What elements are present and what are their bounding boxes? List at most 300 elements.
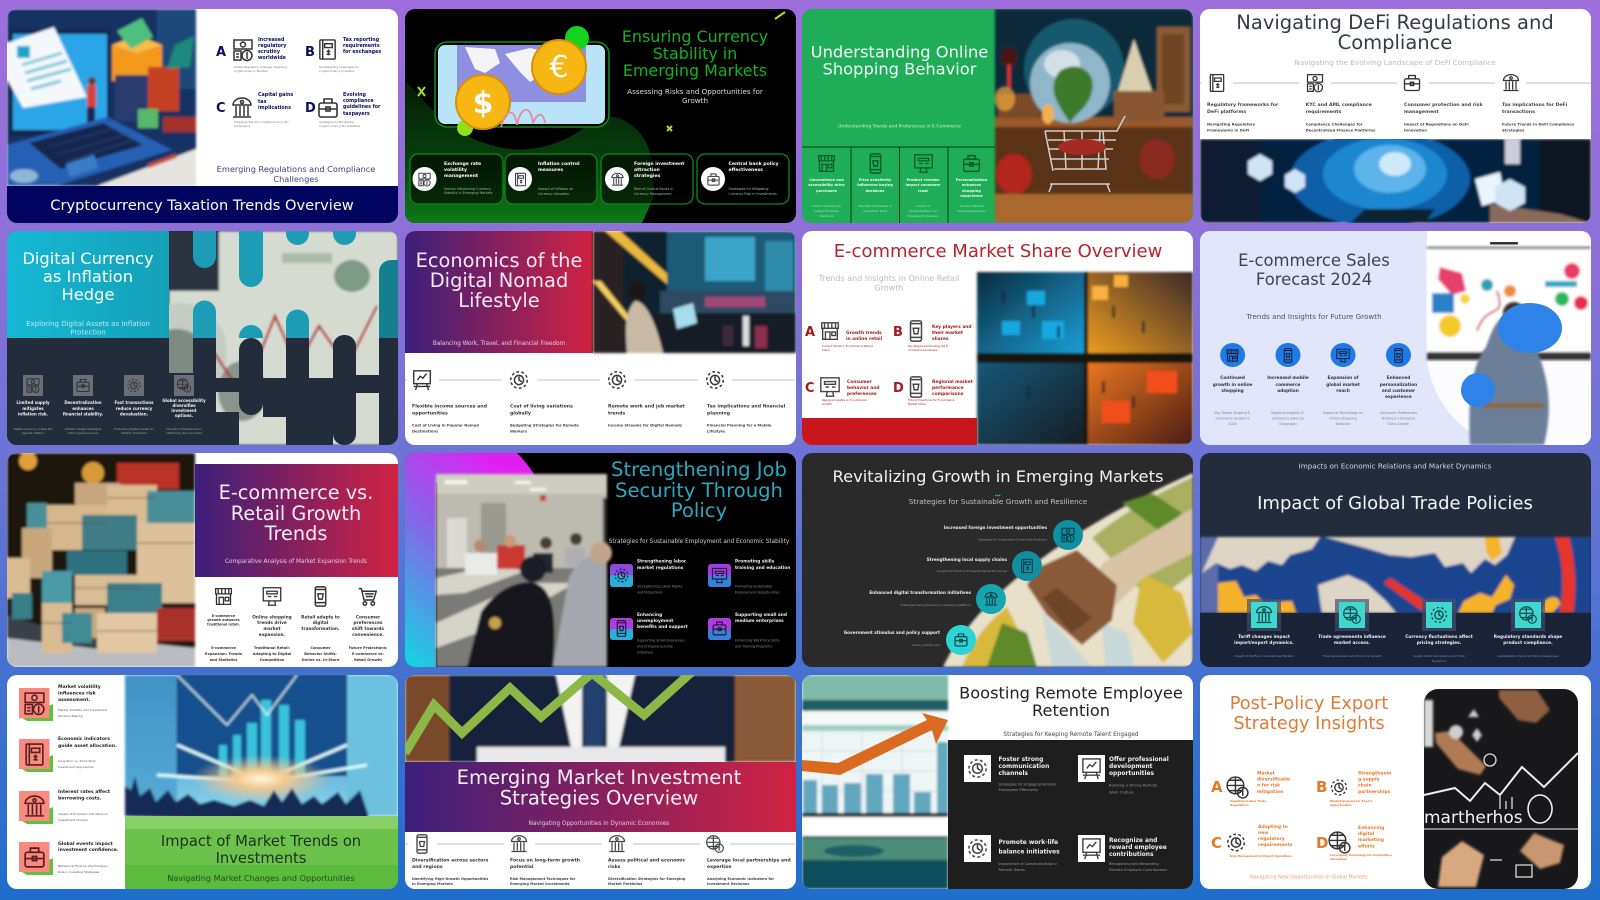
image: crowd cheering at rising chart [125, 675, 398, 824]
column: price sensitivity: Price sensitivity [859, 178, 892, 182]
item: professional development: Building a Strong Remote [1109, 782, 1158, 788]
step 3: Consumer protection and risk [1404, 102, 1483, 108]
column 4 [1494, 599, 1562, 658]
item B: Tax Reporting Challenges for [318, 65, 360, 69]
step: digital transformation: Challenges Facing Recovery in Developing Nations [900, 603, 972, 607]
column 4: Enhanced [1387, 375, 1410, 381]
card: exchange rate: Stability in Emerging Markets [444, 191, 493, 195]
item D: Cryptocurrency Tax Liabilities [319, 124, 361, 128]
column 4 [349, 589, 388, 662]
title: Stability in [653, 44, 737, 63]
step 4 [707, 372, 786, 434]
step 3: risks [608, 864, 621, 870]
column: price sensitivity: influences buying [857, 183, 893, 187]
item C [805, 378, 880, 406]
item D: efforts [1358, 844, 1375, 850]
step 4 [1502, 75, 1574, 132]
column 4: Future Projections: [349, 646, 388, 650]
item B: B [1316, 778, 1327, 796]
column: decentralization: enhances [72, 406, 94, 411]
step 2: potential [510, 864, 534, 870]
item C: C [1211, 834, 1222, 852]
item B: Tax reporting [343, 37, 380, 43]
item C: Compliance [234, 124, 251, 128]
row 3: Investment Choices [58, 818, 88, 822]
column: convenience: Convenience and [809, 178, 844, 182]
column: convenience: Online Purchase [814, 209, 839, 213]
title: as Inflation [43, 267, 133, 286]
panel: Economics of the Digital Nomad Lifestyle [405, 231, 796, 445]
column 1 [1213, 343, 1253, 426]
item A: regulatory [258, 43, 287, 49]
step 3: trends [608, 410, 625, 416]
column: decentralization [63, 375, 104, 435]
step 2 [510, 372, 579, 434]
title: Strengthening Job [611, 458, 787, 481]
item: recognition: Recognize and [1109, 838, 1157, 844]
title band: Balancing Work, Travel, and Financial Freedom [433, 341, 566, 347]
item: unemployment benefits: benefits and support [637, 624, 688, 630]
step 3 [608, 836, 686, 886]
step 2: globally [510, 410, 531, 416]
column: fast transactions: Fast transactions [114, 400, 154, 405]
image: stacked parcels on laptop [5, 452, 195, 667]
column: decentralization: with Cryptocurrencies [68, 431, 99, 435]
column 4: Retail Growth [354, 658, 382, 662]
item B: B [305, 45, 315, 60]
step 3: Innovation [1404, 128, 1427, 132]
column 2: trends drive [257, 620, 287, 626]
item B: Strengthenin [1358, 770, 1391, 776]
step 2: Budgeting Strategies for Remote [510, 424, 579, 428]
step 2 [1306, 75, 1376, 132]
column: price sensitivity: Consumer Trust [863, 209, 888, 213]
card: foreign investment: strategies [634, 173, 661, 179]
column 3: transformation. [301, 626, 340, 632]
column: product reviews: trust [918, 189, 928, 193]
step 2 [510, 836, 580, 886]
column: price sensitivity [857, 154, 893, 213]
column 1: Expansion: Trends [205, 652, 242, 656]
image: dollar bill and red chart [131, 231, 398, 445]
item: skills training: Employment Opportunities [735, 590, 780, 594]
column: personalization: Personalization [956, 178, 988, 182]
item D: D [305, 101, 316, 116]
card: exchange rate: volatility [444, 167, 467, 173]
step: supply chains [927, 551, 1042, 581]
column: global accessibility: Global accessibility [162, 398, 206, 403]
step 3: Assess political and economic [608, 858, 686, 864]
item B: Key Players Dominating the E- [908, 344, 949, 348]
item A [1211, 770, 1290, 807]
column 1: Key Trends Shaping E- [1214, 411, 1252, 415]
step 4 [707, 836, 791, 886]
item: unemployment benefits: Initiatives [637, 650, 653, 654]
step 4: Future Trends in DeFi Compliance [1502, 122, 1574, 126]
column 2: Traditional Retail: [254, 646, 291, 650]
column: convenience: Factors Influencing [812, 204, 841, 208]
step 4: expertise [707, 864, 731, 870]
subtitle: Exploring Digital Assets as Inflation [26, 320, 150, 328]
column 4: Regulatory standards shape [1494, 634, 1562, 640]
column 2 [1267, 343, 1309, 426]
item: small enterprises: Enhancing Workforce Skills [735, 638, 780, 642]
item A: Adapting to New Trade [1230, 799, 1266, 803]
item: small enterprises: and Training Programs [735, 644, 772, 648]
subtitle: Growth [682, 96, 708, 105]
column 3: Behavior [1336, 422, 1351, 426]
column: global accessibility: diversifies [172, 403, 196, 408]
card: exchange rate: management [444, 173, 479, 179]
column 4: and customer [1382, 388, 1416, 394]
image: hands drawing on chalkboard: martherhos [1424, 808, 1523, 828]
item: professional development [1078, 755, 1169, 794]
item: labor regulations [610, 558, 687, 594]
item D: Enhancing [1358, 825, 1384, 831]
title block: Navigating Market Changes and Opportunities [167, 873, 355, 883]
column 3: Dynamics [1432, 659, 1447, 663]
step 2: Cost of living variations [510, 404, 573, 410]
title: Revitalizing Growth in Emerging Markets [833, 467, 1163, 486]
image: digital finance hologram [1200, 131, 1591, 227]
column 2: commerce Sales by [1272, 416, 1304, 420]
item: professional development: development [1109, 764, 1153, 770]
panel: Cryptocurrency Taxation Trends Overview [7, 9, 398, 223]
column 1: commerce Growth in [1215, 416, 1250, 420]
item: work-life balance: Remote Teams [998, 868, 1025, 872]
item: communication: channels [998, 771, 1029, 777]
row 4: Global events impact [58, 841, 114, 847]
column 1: Continued [1220, 375, 1245, 381]
column 1: E-commerce [211, 646, 236, 650]
step: supply chains: Investment Trends in Emerging Market Economies [937, 569, 1008, 573]
item B [1316, 770, 1391, 807]
item B: B [893, 325, 903, 340]
column: product reviews: Product reviews [907, 178, 939, 182]
column 4: Consumer Preferences [1380, 411, 1417, 415]
column 2: Competition [260, 658, 285, 662]
row 2: Investment Approaches [58, 765, 94, 769]
item A: A [805, 325, 815, 340]
column 4 [1380, 343, 1417, 426]
row 1 [19, 684, 108, 721]
column: limited supply: Limited supply [16, 400, 50, 405]
item: communication: Strategies for Engaging Remote [998, 782, 1057, 786]
item D [893, 377, 973, 406]
column 1: import/export dynamics. [1234, 640, 1294, 646]
item: work-life balance [964, 835, 1060, 872]
column 3: Expansion of [1327, 375, 1359, 381]
column 3 [301, 587, 340, 662]
item B: chain [1358, 782, 1372, 788]
panel: Ensuring Currency Stability [405, 9, 796, 223]
subtitle: Trends and Insights in Online Retail [818, 274, 959, 283]
step 4: Analyzing Economic Indicators for [707, 877, 774, 881]
item A: n for risk [1257, 782, 1281, 788]
column 3: Consumer [310, 646, 331, 650]
item D: Strategies for Minimizing [319, 120, 354, 124]
column 2: Regional Insights: E- [1271, 411, 1306, 415]
item A: Cryptocurrency Taxation [234, 69, 268, 73]
title: Post-Policy Export [1230, 693, 1388, 714]
image: handshake over world map [943, 473, 1193, 667]
column 3: reach [1336, 388, 1350, 394]
step 1: Cost of Living in Popular Nomad [412, 424, 479, 428]
column 4: convenience. [352, 632, 384, 638]
column 2: Online shopping [252, 614, 292, 620]
column 4: preferences [353, 620, 383, 626]
item C: Growth [822, 402, 832, 406]
item: skills training [708, 558, 790, 594]
item D [305, 92, 381, 128]
item: communication: communication [998, 764, 1049, 770]
panel: Impact of Market Trends on Investments [7, 675, 398, 889]
step 1: Flexible income sources and [412, 404, 487, 410]
item: recognition: Recognizing and Rewarding [1109, 862, 1159, 866]
column 1: E-commerce [212, 614, 236, 618]
item B [893, 321, 972, 352]
column 4: personalization [1380, 382, 1417, 388]
step: foreign investment: Strategies for Sustainable Growth Post-Pandemic [978, 538, 1047, 542]
title: Policy [671, 499, 728, 522]
item A: A [216, 45, 226, 60]
column: personalization: shopping [962, 189, 981, 193]
item: labor regulations: market regulations [637, 565, 684, 571]
column 3: pricing strategies. [1417, 640, 1462, 646]
step 1: and regions [412, 864, 443, 870]
card: inflation control: Inflation control [538, 161, 580, 167]
item D: D [893, 381, 904, 396]
item A: Current Trends in E-commerce Market [822, 344, 873, 348]
item A: A [1211, 778, 1223, 796]
column 3: global market [1326, 382, 1360, 388]
step 4: Leverage local partnerships and [707, 858, 791, 864]
row 2 [19, 736, 117, 772]
column: fast transactions: Evaluating Digital Assets for [114, 427, 155, 431]
subtitle with arrows: ▸▸▸ [995, 492, 1001, 498]
panel: Strengthening Job Security Through Policy [405, 453, 796, 667]
column: price sensitivity: The Role of Reviews in [857, 204, 892, 208]
item D: comparisons [932, 391, 964, 397]
row 4: investment confidence. [58, 847, 119, 853]
item: professional development: opportunities [1109, 771, 1154, 777]
item C: Regional Insights on E-commerce [822, 398, 867, 402]
panel: Emerging Market Investment Strategies Overview [405, 675, 796, 889]
step: digital transformation: Enhanced digital transformation initiatives [869, 590, 971, 595]
image: world trade map [1200, 537, 1591, 613]
row 2: guide asset allocation. [58, 743, 117, 749]
column 2: commerce [1276, 382, 1301, 388]
column 4: product compliance. [1503, 640, 1553, 646]
item B: for exchanges [343, 49, 381, 55]
image: colour blocks quadrants [977, 272, 1193, 445]
item C: C [805, 381, 815, 396]
title: Understanding Online [811, 42, 988, 62]
panel backgrounds [7, 231, 169, 445]
card: foreign investment: attraction [634, 167, 660, 173]
item B: requirements [343, 43, 380, 49]
gradient accent shape [405, 453, 539, 667]
column 4: Sales Growth [1388, 422, 1409, 426]
item C: tax [258, 99, 268, 105]
step 3: Diversification Strategies for Emerging [608, 877, 686, 881]
item B [305, 37, 381, 73]
row 3: borrowing costs. [58, 796, 102, 802]
item: labor regulations: and Protections [637, 590, 663, 594]
column 1 [205, 589, 242, 662]
timeline line [1200, 82, 1591, 84]
item: labor regulations: Strengthening labor [637, 558, 687, 564]
item D: D [1316, 834, 1328, 852]
item A: Market [1257, 770, 1276, 776]
eyebrow text: Impacts on Economic Relations and Market Dynamics [1299, 462, 1492, 470]
item: recognition [1078, 835, 1167, 872]
column: decentralization: Decentralization [64, 400, 102, 405]
column 2: Geography [1279, 422, 1297, 426]
step 1: Identifying High-Growth Opportunities [412, 877, 488, 881]
item A: Growth trends [846, 330, 882, 336]
column 1: shopping [1221, 388, 1244, 394]
item A: Share [822, 348, 830, 352]
row 2: Long-Term vs. Short-Term [58, 759, 96, 763]
panel: Digital Currency as Inflation Hedge [7, 231, 398, 445]
title: Boosting Remote Employee [959, 684, 1183, 702]
title band: Lifestyle [458, 289, 540, 312]
step 1: Destinations [412, 430, 439, 434]
subtitle with arrows [909, 492, 1088, 506]
title: Ensuring Currency [622, 27, 768, 46]
item: recognition: reward employee [1109, 845, 1167, 851]
item D: marketing [1358, 837, 1384, 843]
item B: commerce Landscape [908, 348, 938, 352]
column: convenience [808, 156, 845, 218]
column 2 [252, 588, 292, 662]
card: foreign investment [601, 154, 693, 204]
card: exchange rate: Exchange rate [444, 161, 481, 167]
column: product reviews: Shopping Experience [907, 214, 939, 218]
column 4: Consumer [356, 614, 381, 620]
card: inflation control [505, 154, 597, 204]
item C: implications [258, 105, 291, 111]
step 3 [608, 372, 685, 428]
step 1: in Emerging Markets [412, 882, 453, 886]
item: small enterprises: Supporting small and [735, 612, 787, 618]
dark content panel [948, 740, 1193, 889]
title: E-commerce Sales [1238, 251, 1390, 270]
item C: new [1258, 831, 1268, 836]
step 3: Income Streams for Digital Nomads [608, 424, 683, 428]
step 2: Emerging Market Investments [510, 882, 570, 886]
item: communication [964, 755, 1057, 792]
item C: Consumer [847, 379, 873, 385]
panel: Navigating DeFi Regulations [1200, 9, 1591, 223]
item C: behavior and [847, 385, 880, 391]
column 2: adoption [1277, 388, 1299, 394]
image: laptop with bar chart and orange arrow [802, 675, 948, 889]
timeline line [405, 379, 795, 381]
item: skills training: Promoting skills [735, 558, 775, 564]
title block: Investments [216, 850, 306, 867]
column: personalization: enhances [962, 183, 981, 187]
item C: C [216, 101, 226, 116]
column: limited supply: Digital Currency: A New Tax [14, 427, 53, 431]
step 4: Lifestyle [707, 430, 725, 434]
column: personalization: experience [960, 194, 983, 198]
title: Security Through [615, 479, 783, 502]
step 1 [1207, 75, 1279, 132]
column: personalization: Trends in Mobile [958, 204, 984, 208]
column 3: Impact of Technology on [1323, 411, 1363, 415]
gradient title block: Strategies Overview [500, 786, 698, 810]
gradient title block: Trends [264, 522, 327, 545]
column: convenience: purchases [816, 189, 837, 193]
item: work-life balance: Importance of Communication in [998, 862, 1058, 866]
step 4: Strategies [1502, 128, 1525, 132]
title: Forecast 2024 [1256, 270, 1372, 289]
column 2: market access. [1334, 640, 1371, 646]
item: small enterprises: medium enterprises [735, 618, 784, 624]
gradient title block: Navigating Opportunities in Dynamic Economies [529, 821, 669, 827]
card: central bank: Central bank policy [728, 161, 779, 167]
panel: E-commerce Market Share Overview [802, 231, 1193, 445]
step 1 [412, 371, 487, 434]
column: product reviews: impact consumer [906, 183, 941, 187]
item A: worldwide [258, 55, 287, 61]
item C: Emerging Trends in Cryptocurrency Tax [234, 120, 289, 124]
column: fast transactions [114, 375, 155, 435]
row 1: Market Volatility and Investment [58, 708, 108, 712]
column 3: Retail adapts to [301, 614, 340, 620]
item B: partnerships [1358, 789, 1391, 795]
item: recognition: Remote Employee Contributions [1109, 868, 1167, 872]
item A: Global Regulatory Changes Impacting [234, 65, 287, 69]
card: central bank: Strategies for Mitigating [728, 187, 768, 191]
title band: Economics of the [416, 249, 582, 272]
item: recognition: contributions [1109, 852, 1154, 858]
subtitle: Emerging Regulations and Compliance [217, 164, 375, 174]
step 2: Compliance Challenges for [1306, 122, 1363, 126]
row 1: influences risk [58, 690, 97, 696]
item: unemployment benefits [610, 612, 688, 654]
column: product reviews: Personalization on [909, 209, 937, 213]
item D: taxpayers [343, 111, 370, 117]
gradient title block [195, 464, 398, 577]
item A: diversificatio [1257, 776, 1290, 782]
step 1: Diversification across sectors [412, 858, 489, 864]
subtitle: Challenges [273, 174, 319, 184]
step 3: Remote work and job market [608, 404, 685, 410]
column 4: E-commerce vs. [352, 652, 384, 656]
step 4: planning [707, 410, 730, 416]
column 1 [1234, 599, 1294, 658]
item D: Market Share [908, 402, 926, 406]
step 2: requirements [1306, 109, 1342, 115]
footer subtitle: Navigating New Opportunities in Global Markets [1250, 874, 1368, 880]
step 2: Decentralized Finance Platforms [1306, 128, 1376, 132]
title: Impact of Global Trade Policies [1257, 493, 1533, 514]
column 4: shift towards [352, 626, 385, 632]
title: Retention [1032, 701, 1110, 720]
column 3: digital [313, 620, 329, 626]
item C: regulatory [1258, 836, 1285, 842]
image: businessman with rising green arrow [405, 675, 796, 762]
item C: Risk Management in Export Operations [1230, 854, 1292, 858]
step 3: Market Portfolios [608, 882, 642, 886]
step 1: opportunities [412, 410, 448, 416]
item A: mitigation [1257, 789, 1283, 795]
title block [125, 816, 398, 889]
title: Compliance [1338, 31, 1452, 54]
